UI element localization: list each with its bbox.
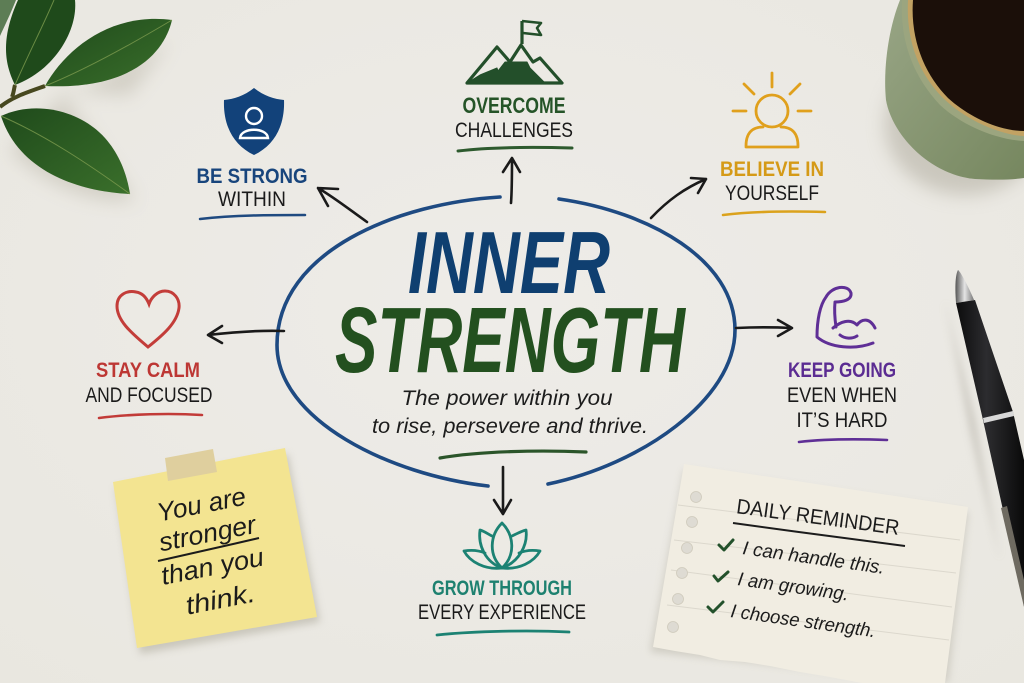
item: keep going	[787, 287, 897, 442]
check marks	[708, 540, 733, 612]
item: keep going: IT’S HARD	[796, 409, 888, 432]
arrows	[208, 158, 792, 514]
item: be strong within: WITHIN	[218, 188, 286, 211]
item: believe in yourself: BELIEVE IN	[720, 158, 824, 181]
sticky note text: think.	[183, 578, 258, 621]
icon: shield	[224, 88, 284, 155]
item: stay calm: AND FOCUSED	[86, 384, 212, 407]
item: overcome challenges	[455, 21, 573, 151]
coffee cup	[885, 0, 1024, 195]
item: be strong within: BE STRONG	[196, 165, 308, 188]
sticky note text: stronger	[156, 509, 260, 557]
sticky note text: than you	[158, 542, 266, 591]
item: overcome challenges: OVERCOME	[462, 93, 566, 118]
item: keep going: KEEP GOING	[788, 359, 896, 382]
reminder text	[729, 495, 901, 642]
item: believe in yourself: YOURSELF	[725, 182, 819, 205]
item: grow through: GROW THROUGH	[432, 577, 572, 600]
leaf sprig	[0, 0, 172, 201]
item: overcome challenges: CHALLENGES	[455, 119, 573, 142]
item: grow through	[418, 523, 586, 635]
title: STRENGTH	[335, 288, 686, 392]
sticky note text: You are	[154, 481, 248, 527]
item: be strong within	[196, 88, 308, 219]
icon: flexed arm	[817, 287, 875, 347]
sticky note	[113, 448, 320, 654]
subtitle: to rise, persevere and thrive.	[372, 415, 648, 438]
title: INNER	[408, 213, 610, 312]
item: stay calm	[86, 291, 212, 418]
icon: heart	[117, 291, 179, 347]
subtitle	[372, 387, 648, 458]
icon: lotus	[464, 523, 540, 568]
item: grow through: EVERY EXPERIENCE	[418, 601, 586, 624]
pen	[945, 270, 1024, 607]
icon: sun person	[733, 73, 811, 147]
item: keep going: EVEN WHEN	[787, 384, 897, 407]
tape	[165, 449, 217, 481]
daily reminder note	[650, 464, 968, 683]
reminder text: I choose strength.	[729, 601, 877, 642]
punch holes	[668, 492, 702, 632]
subtitle: The power within you	[402, 387, 613, 410]
icon: mountain flag	[467, 21, 562, 83]
item: believe in yourself	[720, 73, 825, 215]
title	[335, 213, 686, 392]
central oval	[277, 197, 735, 486]
reminder text: DAILY REMINDER	[735, 495, 901, 540]
item: stay calm: STAY CALM	[96, 359, 200, 382]
reminder text: I can handle this.	[741, 538, 886, 579]
reminder text: I am growing.	[736, 569, 850, 606]
sticky note text	[154, 481, 266, 621]
